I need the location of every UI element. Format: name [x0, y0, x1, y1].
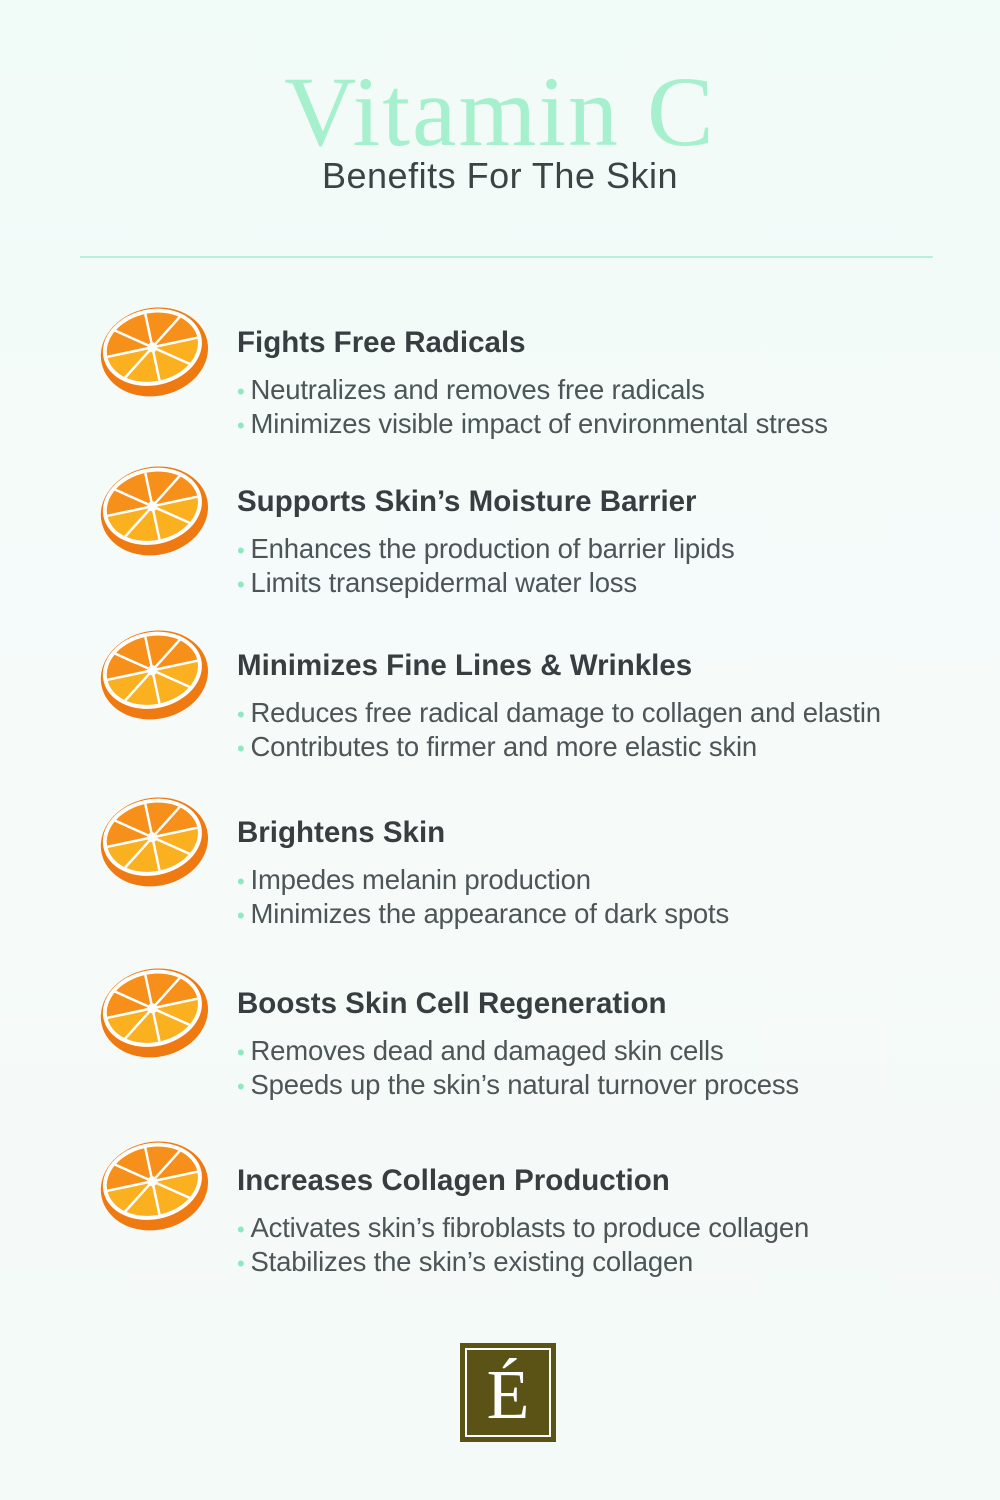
icon: orange: [100, 1142, 208, 1230]
item 5: regeneration: [100, 968, 799, 1100]
logo: É: [487, 1357, 529, 1434]
bullets: •Impedes melanin production: [237, 864, 591, 895]
heading: Minimizes Fine Lines & Wrinkles: [237, 649, 692, 682]
item 2: moisture barrier: [100, 466, 735, 598]
bullets: •Activates skin’s fibroblasts to produce collagen: [237, 1212, 809, 1243]
bullets: •Enhances the production of barrier lipids: [237, 533, 735, 564]
icon: orange: [100, 466, 208, 556]
logo: [460, 1343, 556, 1442]
item 6: collagen: •Stabilizes the skin’s existing collagen: [237, 1246, 693, 1277]
icon: orange: [100, 798, 208, 886]
item 1: fights free radicals: •Minimizes visible impact of environmental stress: [237, 408, 828, 439]
item 4: brightens: •Minimizes the appearance of dark spots: [237, 898, 729, 929]
item 6: collagen: [100, 1142, 809, 1277]
item 1: fights free radicals: [100, 308, 828, 439]
icon: orange: [100, 630, 208, 720]
item 5: regeneration: •Speeds up the skin’s natural turnover process: [237, 1069, 799, 1100]
heading: Brightens Skin: [237, 816, 445, 849]
title: Vitamin C: [284, 56, 716, 167]
item 3: fine lines: [100, 630, 881, 762]
item 2: moisture barrier: •Limits transepidermal water loss: [237, 567, 637, 598]
bullets: •Reduces free radical damage to collagen and elastin: [237, 697, 881, 728]
icon: orange: [100, 308, 208, 396]
icon: orange: [100, 968, 208, 1058]
item 4: brightens: [100, 798, 729, 929]
heading: Boosts Skin Cell Regeneration: [237, 987, 666, 1020]
bullets: •Removes dead and damaged skin cells: [237, 1035, 724, 1066]
subtitle: Benefits For The Skin: [322, 155, 678, 196]
heading: Supports Skin’s Moisture Barrier: [237, 485, 697, 518]
bullets: •Neutralizes and removes free radicals: [237, 374, 705, 405]
item 3: fine lines: •Contributes to firmer and more elastic skin: [237, 731, 757, 762]
heading: Fights Free Radicals: [237, 326, 526, 359]
heading: Increases Collagen Production: [237, 1164, 670, 1197]
